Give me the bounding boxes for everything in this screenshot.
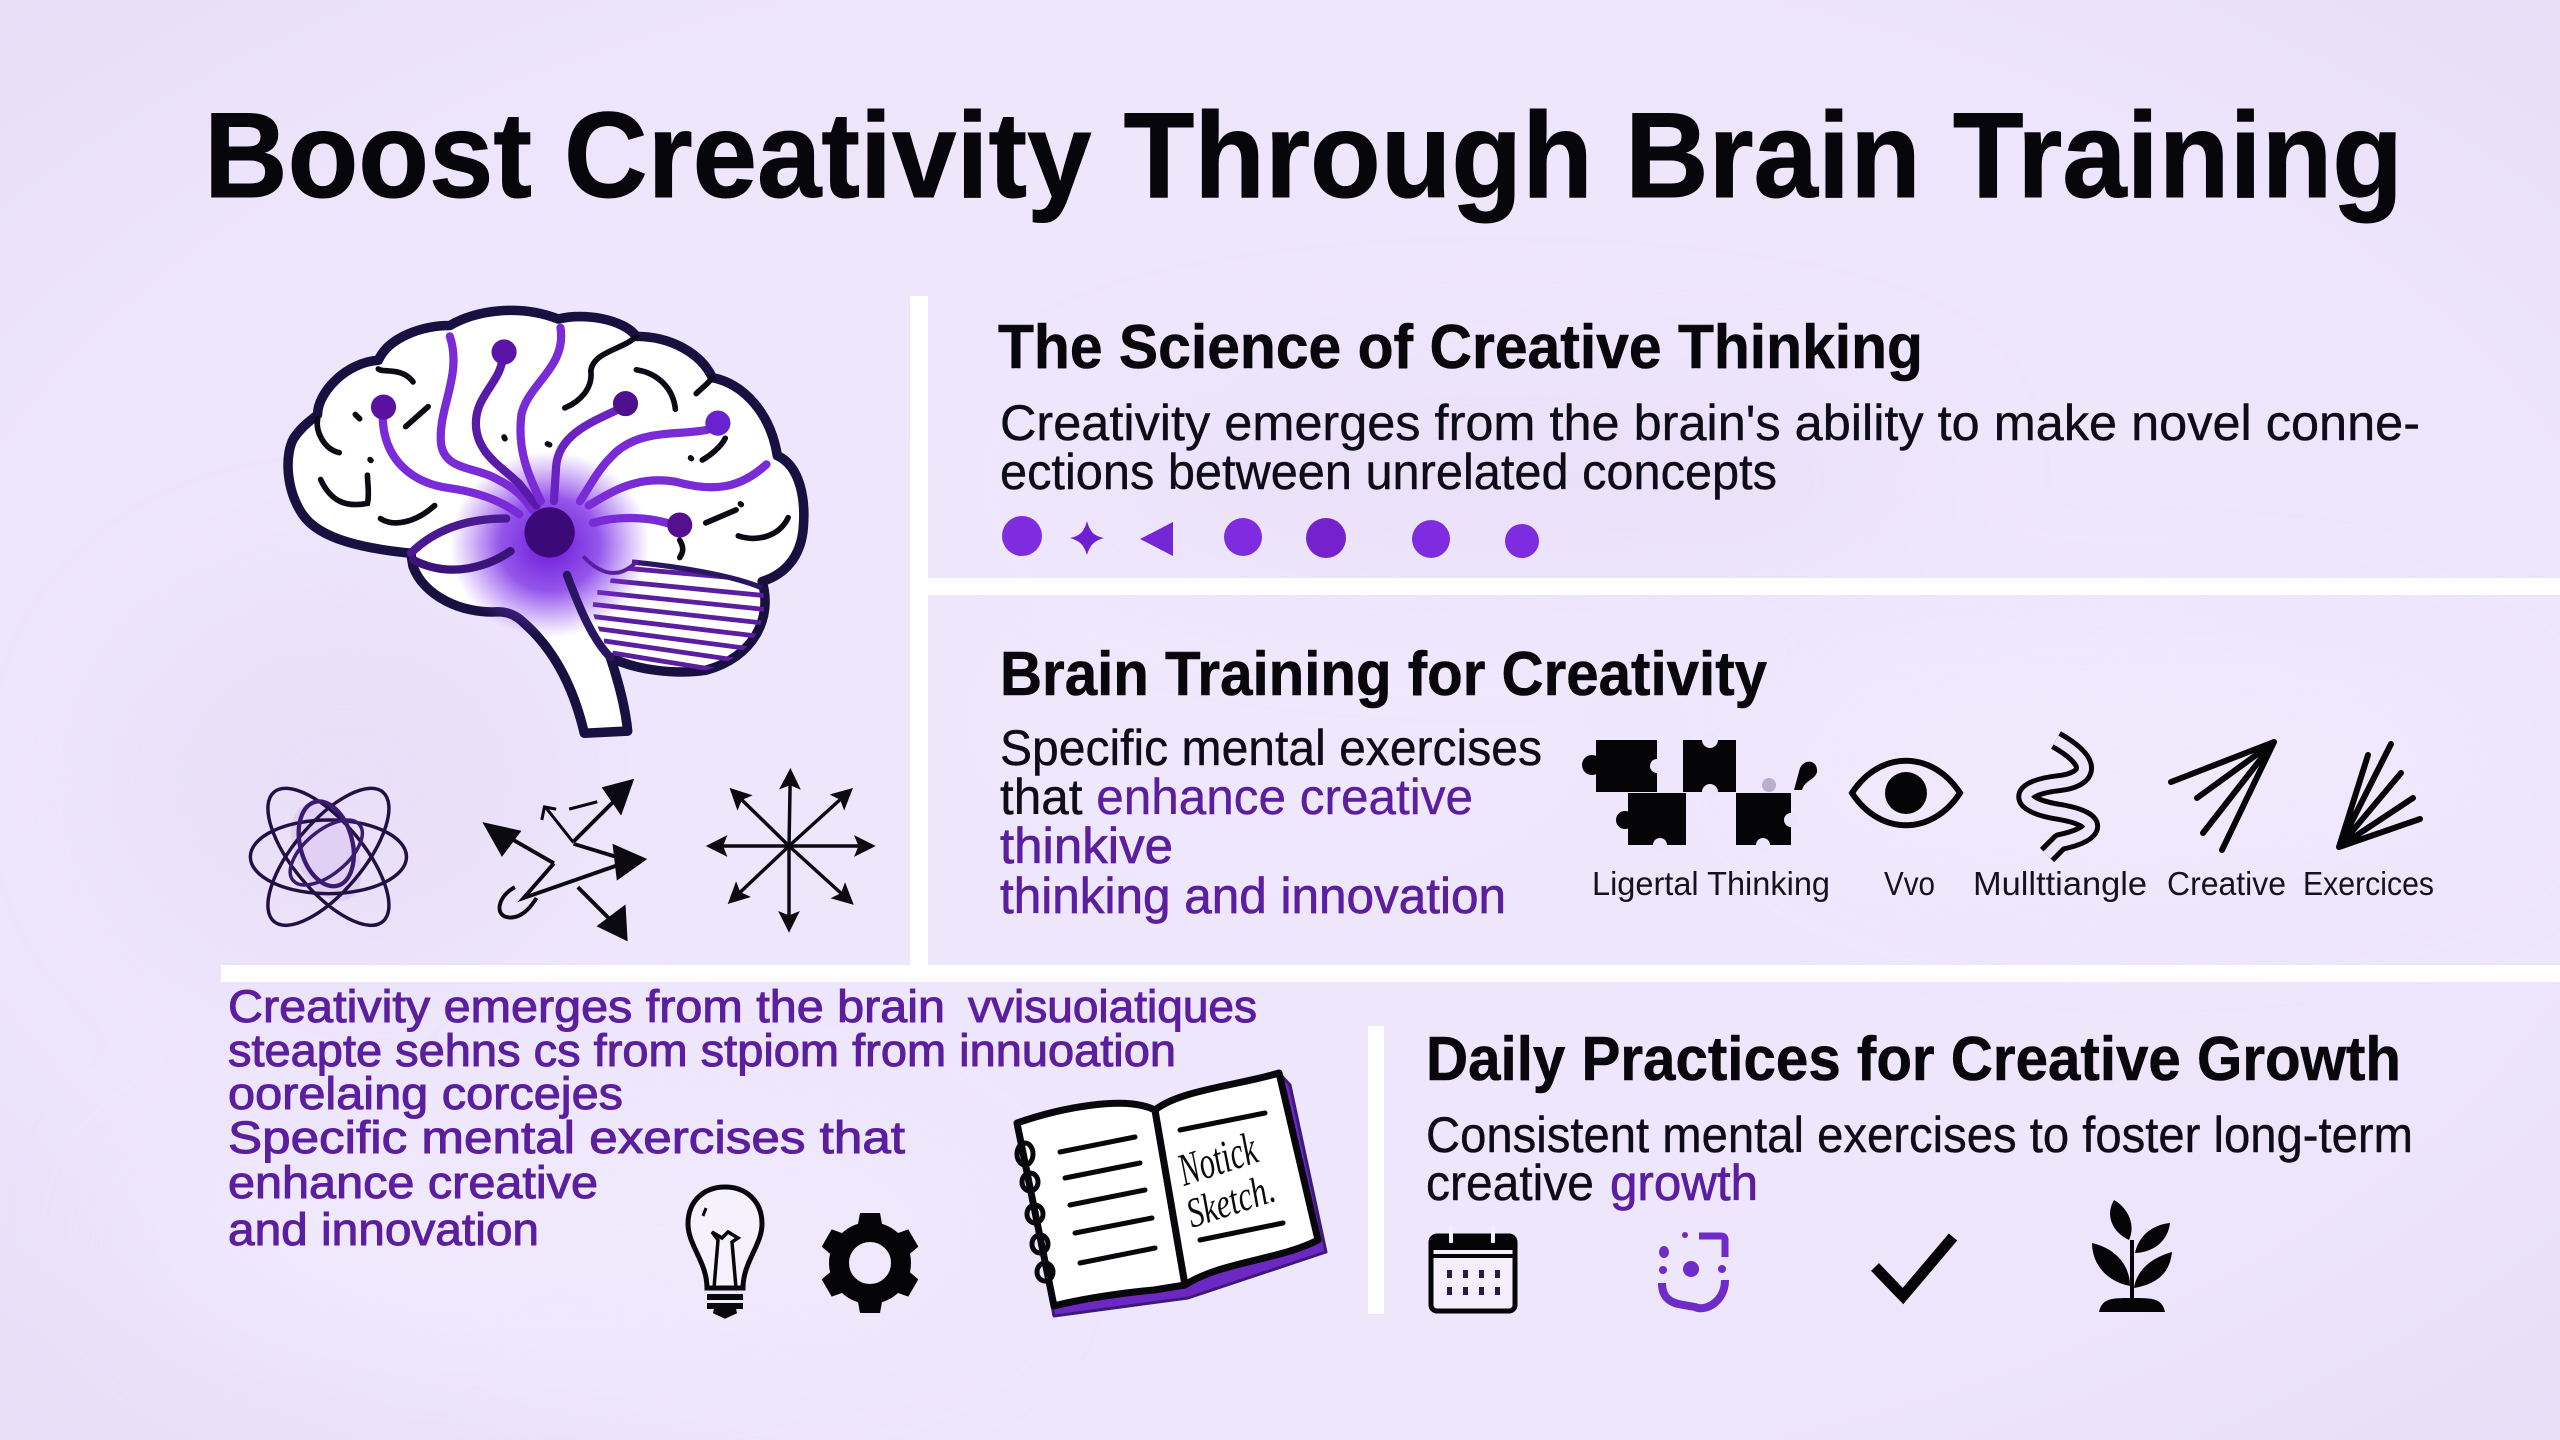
body text: thinkive bbox=[1000, 818, 1173, 874]
central glow bbox=[450, 451, 649, 638]
title: Boost Creativity Through Brain Training bbox=[204, 87, 2403, 223]
panel: purple text block: Specific mental exercises that bbox=[228, 1112, 906, 1163]
body text: growth bbox=[1610, 1155, 1758, 1211]
heading: Brain Training for Creativity bbox=[1000, 640, 1767, 709]
heading: Daily Practices for Creative Growth bbox=[1426, 1025, 2401, 1094]
panel: purple text block: enhance creative bbox=[228, 1157, 598, 1208]
body text bbox=[1000, 720, 1542, 924]
panel: purple text block: vvisuoiatiques bbox=[968, 981, 1257, 1032]
body text: Consistent mental exercises to foster long-term bbox=[1426, 1107, 2413, 1163]
panel dividers bbox=[221, 296, 2560, 1314]
panel: brain illustration bbox=[288, 310, 804, 733]
icon: converging lines bbox=[2171, 742, 2274, 850]
purple dot row bbox=[1002, 516, 1539, 558]
icon: notebook: Sketch. bbox=[1181, 1166, 1281, 1238]
brain folds bbox=[317, 336, 788, 558]
neural pathways bbox=[383, 328, 766, 657]
panel: purple text block: steapte sehns cs from stpiom from innuoation bbox=[228, 1025, 1176, 1076]
icon: notebook: Notick bbox=[1171, 1122, 1264, 1196]
icon labels: Mullttiangle bbox=[1973, 865, 2147, 902]
icon: divergent arrows bbox=[482, 779, 647, 941]
body text: Specific mental exercises bbox=[1000, 720, 1542, 776]
icon labels: Exercices bbox=[2303, 865, 2434, 902]
icon: check mark bbox=[1875, 1237, 1953, 1296]
icon: light bulb bbox=[688, 1187, 762, 1316]
body text: thinking and innovation bbox=[1000, 868, 1506, 924]
panel: purple text block: Creativity emerges from the brain bbox=[228, 981, 945, 1032]
body text bbox=[1426, 1107, 2413, 1211]
panel: daily practices bbox=[1426, 1025, 2413, 1312]
icon: fan lines bbox=[2339, 744, 2420, 847]
body text bbox=[1000, 395, 2420, 500]
panel: purple text block: oorelaing corcejes bbox=[228, 1068, 623, 1119]
icon labels: Creative bbox=[2167, 865, 2286, 902]
cerebellum hatching bbox=[593, 568, 775, 670]
pathway nodes bbox=[371, 339, 730, 558]
icon: notebook bbox=[1017, 1073, 1326, 1316]
icon labels: Vvo bbox=[1884, 865, 1935, 902]
icon: purple focus frame bbox=[1659, 1232, 1726, 1308]
heading: The Science of Creative Thinking bbox=[998, 313, 1923, 382]
icon: atom bbox=[247, 770, 409, 944]
icon: gear bbox=[820, 1213, 920, 1313]
panel: purple text block: and innovation bbox=[228, 1204, 539, 1255]
icon: plant bbox=[2092, 1200, 2172, 1312]
body text: that enhance creative bbox=[1000, 769, 1473, 825]
body text: ections between unrelated concepts bbox=[1000, 444, 1777, 500]
icon: eye bbox=[1852, 761, 1960, 825]
icon labels bbox=[1592, 865, 2434, 902]
body text: Creativity emerges from the brain's ability to make novel conne- bbox=[1000, 395, 2420, 451]
icon: puzzle pieces bbox=[1582, 732, 1817, 852]
icon: calendar bbox=[1431, 1227, 1515, 1311]
icon labels: Ligertal Thinking bbox=[1592, 865, 1830, 902]
brain outline bbox=[288, 310, 804, 733]
panel: science of creative thinking bbox=[998, 313, 2420, 558]
panel: brain training for creativity bbox=[1000, 640, 2434, 924]
panel: purple text block bbox=[228, 981, 1257, 1255]
body text: creative bbox=[1426, 1155, 1594, 1211]
icon: squiggle bbox=[2026, 740, 2090, 855]
icon: radial arrows bbox=[710, 772, 871, 928]
